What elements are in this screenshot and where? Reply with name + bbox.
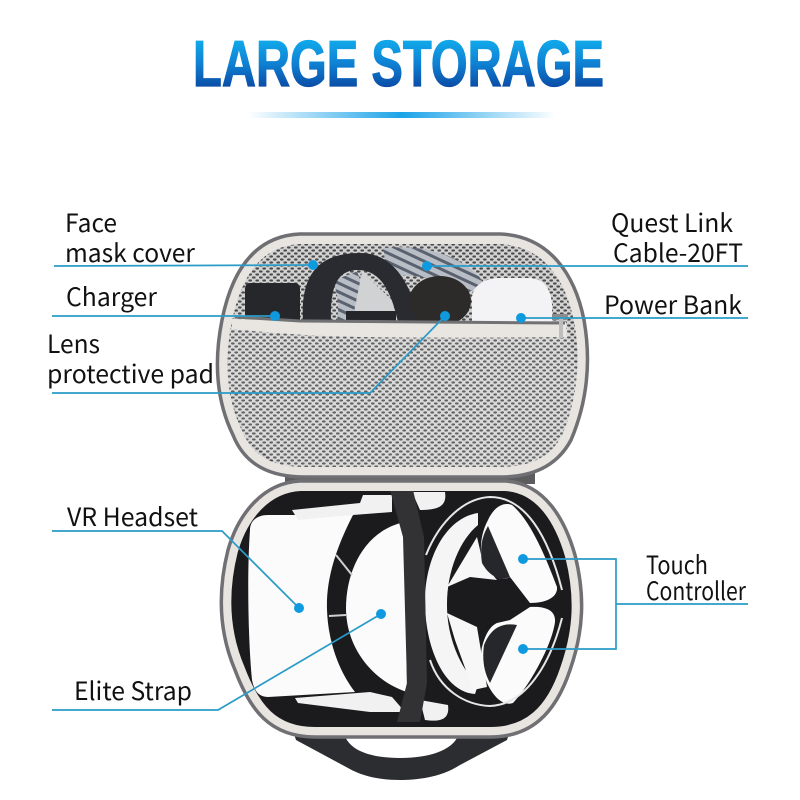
zipper xyxy=(552,314,568,338)
icon: face mask cover xyxy=(303,253,421,322)
icon: cable xyxy=(345,261,472,322)
icon: handle xyxy=(293,731,510,780)
icon: charger xyxy=(245,283,300,325)
callout: VR headset xyxy=(52,498,304,613)
icon: touch controller bottom xyxy=(447,607,555,704)
case edge xyxy=(217,234,588,477)
case lining xyxy=(217,234,588,477)
hinge xyxy=(285,468,535,484)
callout: touch controller: Touch xyxy=(646,546,708,582)
panel: upper case compartment xyxy=(217,234,588,477)
mesh pocket xyxy=(226,322,578,472)
icon: lens protective pad xyxy=(409,276,471,326)
callout: charger: Charger xyxy=(66,278,157,314)
strap band xyxy=(390,490,427,722)
case lining xyxy=(221,481,582,737)
callout: quest link cable xyxy=(422,204,748,271)
icon: touch controller top xyxy=(447,504,557,603)
callout: face mask cover xyxy=(54,204,318,270)
callout: lens protective pad xyxy=(47,311,450,393)
controller ring xyxy=(426,497,562,706)
callout: charger xyxy=(52,278,280,321)
callout: lens protective pad: Lens xyxy=(47,325,100,361)
callout: touch controller: Controller xyxy=(646,572,746,608)
callout: face mask cover: mask cover xyxy=(65,234,195,270)
callout: power bank: Power Bank xyxy=(604,286,742,322)
title underline xyxy=(248,112,556,118)
icon: VR headset xyxy=(248,495,405,712)
callout: elite strap: Elite Strap xyxy=(74,672,192,708)
callout: quest link cable: Cable-20FT xyxy=(613,234,743,270)
callout: elite strap xyxy=(52,609,386,710)
panel: lower case compartment xyxy=(221,481,582,737)
icon: power bank xyxy=(472,278,552,322)
callout: quest link cable: Quest Link xyxy=(611,204,733,240)
callout: face mask cover: Face xyxy=(65,204,117,240)
icon: elite strap xyxy=(329,492,478,721)
callout: power bank xyxy=(516,286,748,323)
callout: lens protective pad: protective pad xyxy=(47,355,214,391)
case edge xyxy=(221,481,582,737)
callout: touch controller xyxy=(518,546,748,654)
title: LARGE STORAGE xyxy=(193,27,604,100)
pocket trim xyxy=(232,319,567,338)
callout: VR headset: VR Headset xyxy=(67,498,199,534)
